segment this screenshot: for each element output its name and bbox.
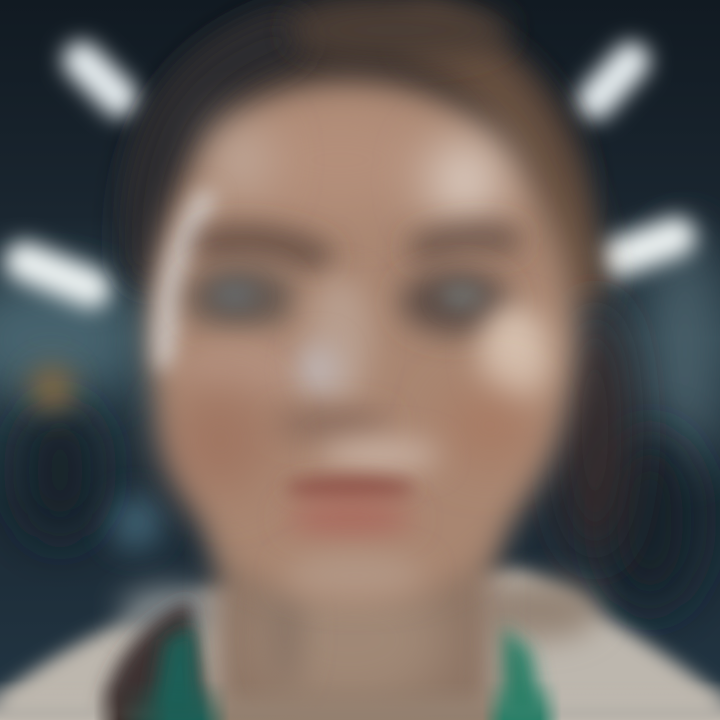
left cheek tone bbox=[180, 340, 300, 400]
right eyebrow bbox=[420, 237, 510, 248]
right cheek highlight bbox=[480, 305, 550, 405]
nose bbox=[308, 275, 372, 405]
left eyebrow bbox=[205, 240, 320, 258]
ceiling light: middle left bbox=[0, 235, 117, 314]
forehead highlight bbox=[230, 105, 450, 215]
ceiling light: top right bbox=[568, 34, 658, 128]
forehead bright patch bbox=[427, 138, 503, 222]
upper lip highlight bbox=[320, 439, 440, 471]
left cheek blush bbox=[170, 385, 270, 495]
hair bbox=[135, 0, 627, 560]
right cheek blush bbox=[445, 387, 535, 463]
lips bbox=[285, 476, 415, 500]
light streak on temple bbox=[165, 200, 205, 360]
ceiling light: top left bbox=[55, 33, 147, 125]
face bbox=[148, 85, 577, 600]
right eye bbox=[400, 270, 510, 334]
ceiling light: middle right bbox=[590, 211, 702, 284]
left eye bbox=[185, 266, 295, 330]
chin bbox=[285, 553, 425, 597]
bottom edge colour strip bbox=[0, 680, 720, 720]
coat and neck bbox=[0, 520, 720, 720]
